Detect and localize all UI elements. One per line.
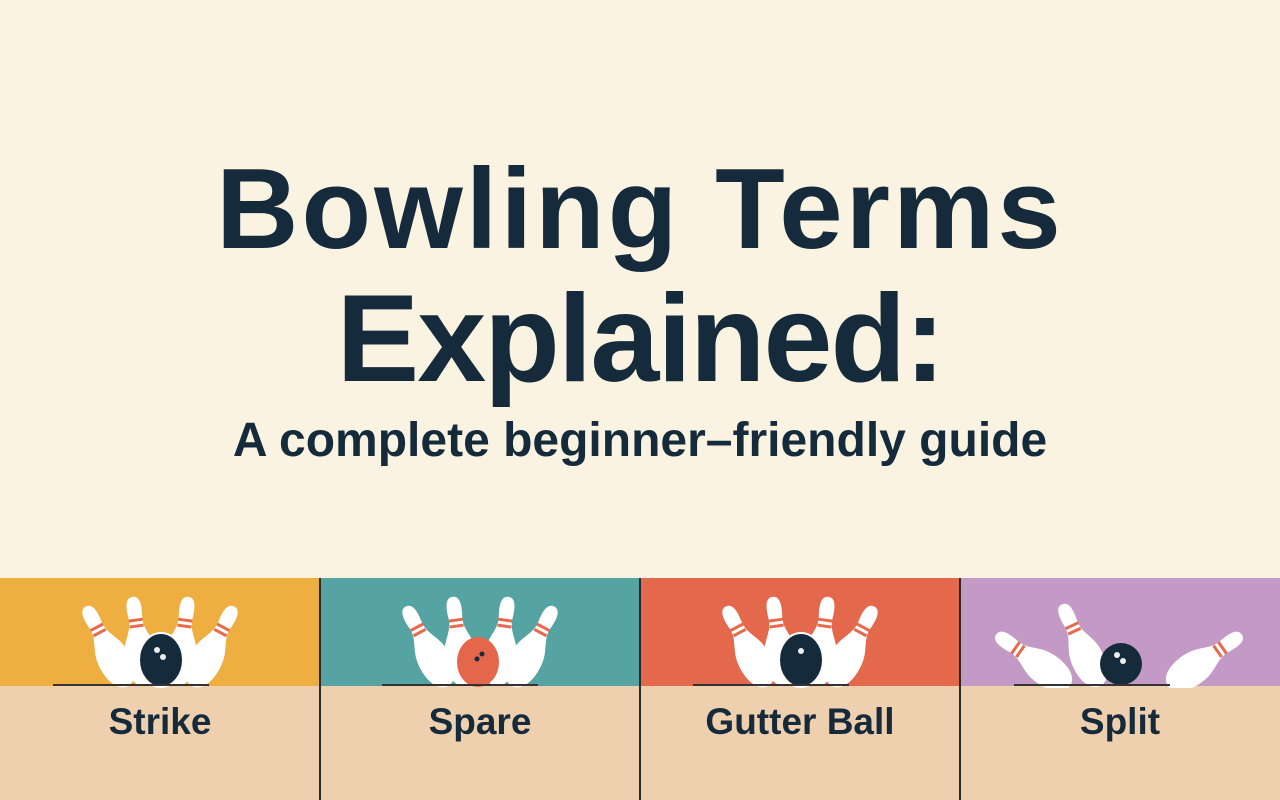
label: strike: Strike bbox=[109, 701, 211, 742]
title bbox=[216, 146, 1064, 408]
panel: gutter ball bbox=[640, 578, 960, 800]
title: Explained: bbox=[336, 270, 944, 408]
title: Bowling Terms bbox=[216, 146, 1064, 273]
subtitle: A complete beginner–friendly guide bbox=[233, 414, 1047, 467]
label: split: Split bbox=[1080, 701, 1160, 742]
panel: spare bbox=[320, 578, 640, 800]
panel: split bbox=[960, 578, 1280, 800]
icon: strike pins bbox=[53, 596, 238, 688]
icon: gutter ball pins bbox=[693, 596, 878, 688]
icon: split pins bbox=[995, 604, 1243, 688]
panel: strike bbox=[0, 578, 320, 800]
label: spare: Spare bbox=[429, 701, 531, 742]
label: gutter ball: Gutter Ball bbox=[705, 701, 895, 742]
icon: spare pins bbox=[382, 596, 558, 688]
